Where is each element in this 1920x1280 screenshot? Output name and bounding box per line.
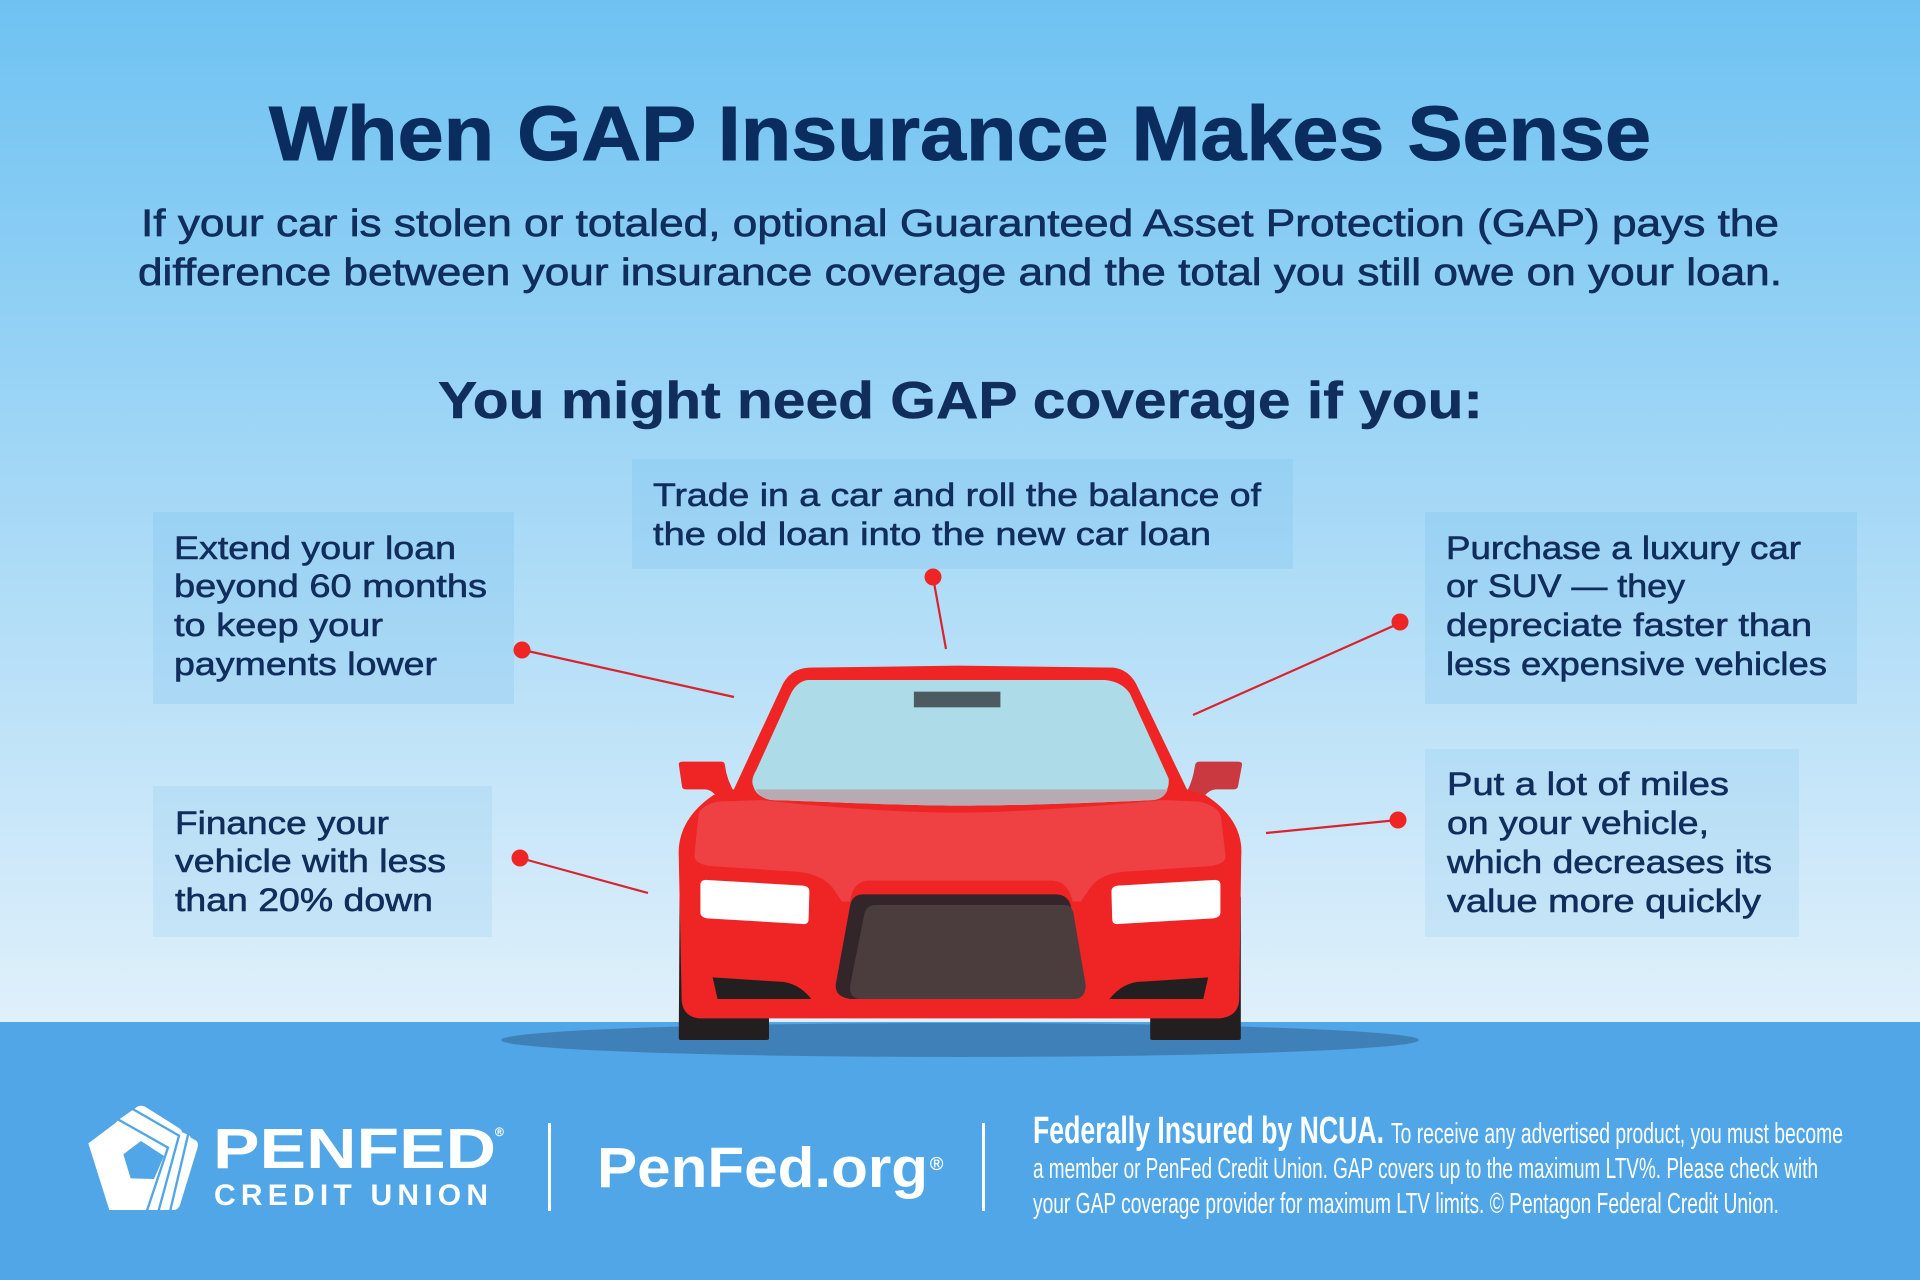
subheading: You might need GAP coverage if you: <box>438 372 1483 430</box>
callout: luxury car <box>1425 512 1857 704</box>
callout: trade in: Trade in a car and roll the balance of <box>653 477 1261 513</box>
callout: miles: value more quickly <box>1447 883 1761 919</box>
car body <box>679 666 1241 1018</box>
callout: miles: which decreases its <box>1446 844 1772 880</box>
grille <box>836 894 1085 999</box>
logo wordmark: CREDIT UNION <box>214 1179 488 1212</box>
dash reflection <box>756 789 1168 806</box>
callout: extend loan: to keep your <box>174 607 383 643</box>
callout: miles: on your vehicle, <box>1447 805 1709 841</box>
website: ® <box>930 1154 943 1174</box>
left headlight <box>700 880 809 924</box>
disclaimer <box>1033 1110 1843 1220</box>
left fog light <box>713 977 811 999</box>
divider <box>548 1123 551 1211</box>
callout: luxury car: Purchase a luxury car <box>1446 530 1801 566</box>
callout: luxury car: depreciate faster than <box>1446 607 1812 643</box>
callout: finance <box>153 786 492 937</box>
right fog light <box>1109 977 1208 999</box>
intro paragraph: difference between your insurance coverage and the total you still owe on your loan. <box>138 252 1782 294</box>
website: PenFed.org <box>597 1136 928 1200</box>
right headlight <box>1111 880 1220 924</box>
callout: extend loan <box>153 512 514 704</box>
left mirror <box>679 762 736 795</box>
callout: miles <box>1425 749 1799 937</box>
intro paragraph: If your car is stolen or totaled, optional Guaranteed Asset Protection (GAP) pays the <box>141 203 1779 245</box>
sky background <box>0 0 1920 1023</box>
right mirror <box>1187 762 1242 795</box>
callout: finance: vehicle with less <box>175 843 446 879</box>
hood <box>694 800 1226 902</box>
callout: finance: than 20% down <box>175 882 433 918</box>
wheels <box>679 897 1241 1040</box>
callout: finance: Finance your <box>175 805 389 841</box>
callout: trade in: the old loan into the new car loan <box>653 516 1211 552</box>
pointer: luxury car <box>1193 614 1408 715</box>
callout: extend loan: beyond 60 months <box>174 568 487 604</box>
pointer: miles <box>1266 812 1406 833</box>
callout: luxury car: less expensive vehicles <box>1446 646 1827 682</box>
logo wordmark <box>213 1117 504 1212</box>
callout: miles: Put a lot of miles <box>1447 766 1729 802</box>
icon: PenFed pentagon logo <box>88 1106 198 1212</box>
pointer: trade in <box>924 568 946 649</box>
intro paragraph <box>138 203 1782 294</box>
logo wordmark: ® <box>495 1125 504 1139</box>
title: When GAP Insurance Makes Sense <box>269 91 1651 177</box>
divider <box>982 1123 985 1211</box>
rearview mirror <box>914 692 1000 707</box>
windshield <box>752 680 1169 806</box>
car shadow <box>501 1023 1419 1057</box>
callout: extend loan: Extend your loan <box>174 530 456 566</box>
ground band <box>0 1022 1920 1280</box>
disclaimer: Federally Insured by NCUA. <box>1033 1110 1384 1152</box>
car illustration <box>679 666 1242 1040</box>
callout: luxury car: or SUV — they <box>1446 568 1685 604</box>
callout: trade in <box>632 459 1293 569</box>
grille inner <box>850 905 1086 999</box>
callout: extend loan: payments lower <box>174 646 437 682</box>
pointer: finance <box>512 850 648 893</box>
logo wordmark: PENFED <box>213 1117 496 1181</box>
pointer: extend loan <box>514 642 734 697</box>
